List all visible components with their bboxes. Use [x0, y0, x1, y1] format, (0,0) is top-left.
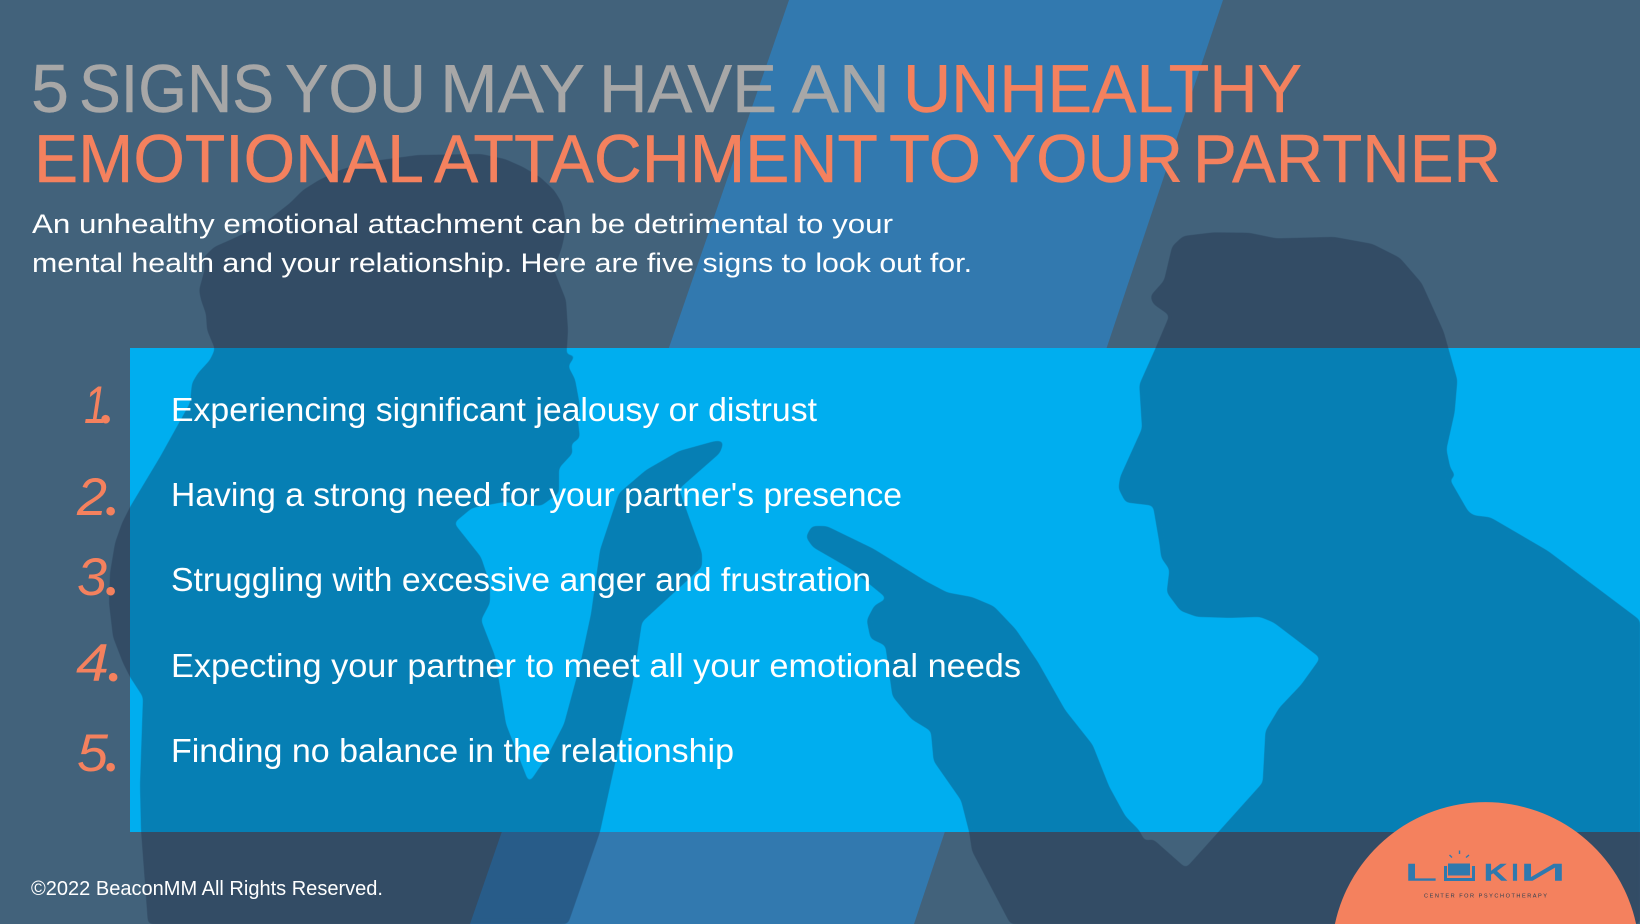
silhouette: man pointing finger: [806, 232, 1640, 924]
panel: list of signs: [130, 348, 1640, 832]
sign 1: Experiencing significant jealousy or distrust: [171, 391, 817, 428]
sign 3: Struggling with excessive anger and frustration: [171, 561, 871, 598]
number 2: .: [104, 469, 117, 527]
logo wordmark: I: [1512, 860, 1518, 887]
title line 2: PARTNER: [1193, 121, 1501, 197]
number 4: 4: [76, 634, 109, 693]
sign 4: Expecting your partner to meet all your emotional needs: [171, 647, 1021, 684]
title line 2: [34, 121, 1501, 197]
title line 1: HAVE: [599, 51, 777, 127]
subtitle: An unhealthy emotional attachment can be detrimental to your: [32, 209, 893, 239]
number 3: .: [104, 549, 117, 607]
title line 1: UNHEALTHY: [903, 51, 1302, 127]
sign 5: Finding no balance in the relationship: [171, 732, 734, 769]
icon: sofa with rays: [1444, 850, 1475, 881]
title line 1: 5: [31, 51, 69, 127]
number 4: [76, 634, 120, 693]
title line 1: MAY: [440, 51, 585, 127]
number 3: 3: [77, 548, 108, 607]
sign 2: Having a strong need for your partner's presence: [171, 476, 902, 513]
number 1: .: [99, 377, 112, 435]
title line 1: YOU: [285, 51, 426, 127]
diagonal stripe: [470, 0, 1223, 924]
title line 2: YOUR: [992, 121, 1183, 197]
silhouette: woman with raised hand: [109, 154, 724, 924]
subtitle: mental health and your relationship. Here are five signs to look out for.: [32, 248, 972, 278]
logo wordmark: И: [1520, 860, 1566, 887]
title line 2: TO: [889, 121, 981, 197]
subtitle: [32, 209, 972, 278]
logo circle: [1335, 802, 1636, 924]
logo wordmark: L: [1404, 860, 1437, 887]
number 5: 5: [77, 724, 109, 783]
number 4: .: [106, 635, 120, 693]
title line 2: EMOTIONAL: [34, 121, 424, 197]
title line 2: ATTACHMENT: [434, 121, 878, 197]
list of five signs: [76, 376, 1021, 783]
title line 1: AN: [792, 51, 890, 127]
title: [31, 51, 1501, 197]
number 5: .: [104, 725, 117, 783]
logo wordmark: [1404, 860, 1566, 887]
logo tagline: CENTER FOR PSYCHOTHERAPY: [1424, 894, 1547, 900]
title line 1: SIGNS: [79, 51, 274, 127]
title line 1: [31, 51, 1302, 127]
logo wordmark: K: [1484, 860, 1508, 887]
logo: Lokin Center for Psychotherapy: [1404, 850, 1566, 900]
number 1: 1: [84, 376, 107, 435]
copyright: ©2022 BeaconMM All Rights Reserved.: [31, 877, 383, 900]
number 2: 2: [76, 468, 107, 527]
